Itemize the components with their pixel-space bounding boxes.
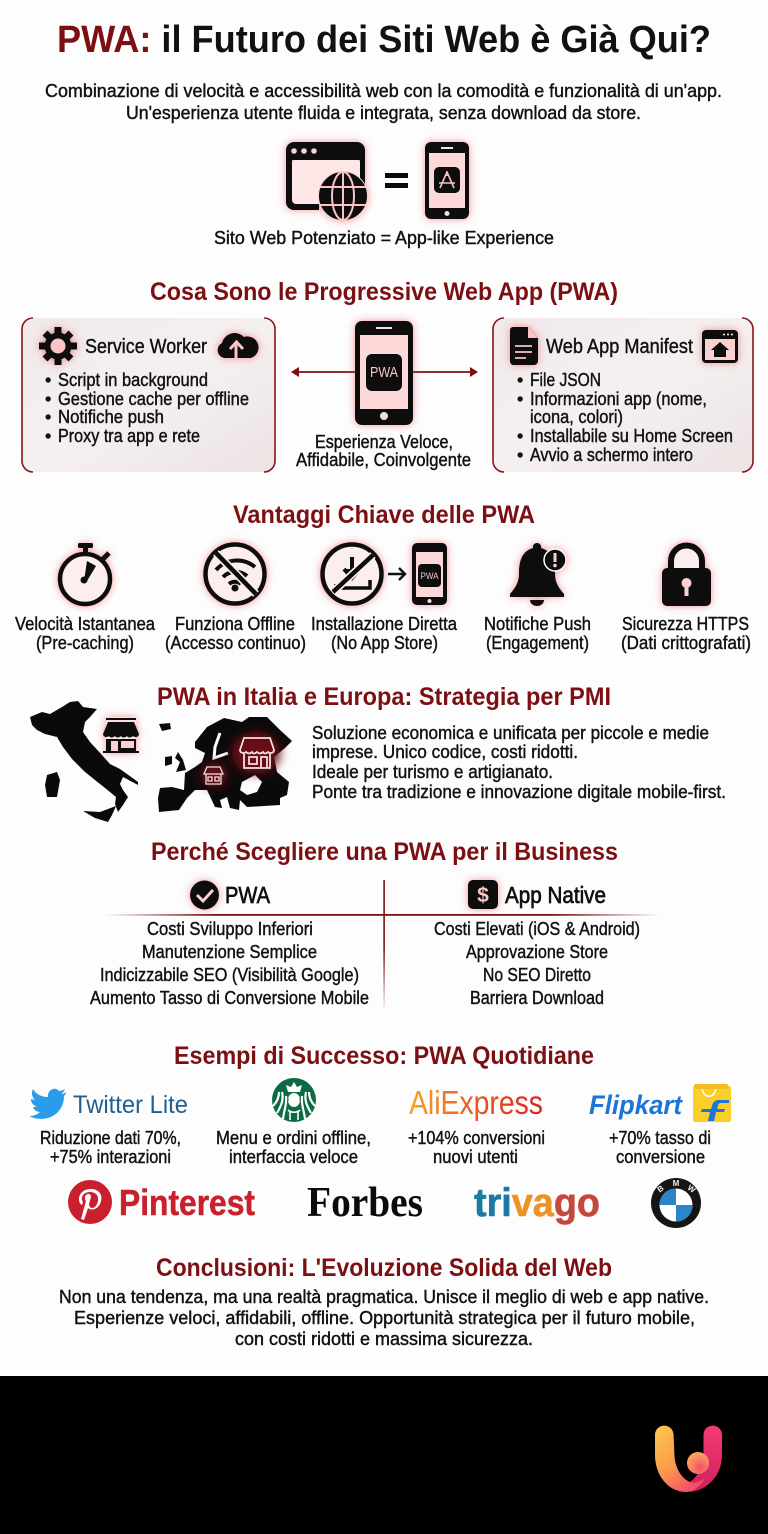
icon: phone with store app (425, 142, 469, 219)
example: AliExpress (408, 1084, 545, 1167)
column: PWA: PWA (225, 882, 271, 908)
panel heading: Service Worker (85, 336, 207, 358)
example: AliExpress: AliExpress (409, 1084, 543, 1121)
icon: small shop (204, 767, 223, 784)
icon: stopwatch (60, 543, 110, 604)
column: native app (434, 880, 640, 1008)
example: Twitter Lite: Twitter Lite (73, 1091, 188, 1119)
icon: phone (355, 321, 413, 425)
logo: Twitter bird (29, 1089, 66, 1119)
bullet list: • (517, 426, 523, 446)
bullet list: Proxy tra app e rete (58, 426, 200, 446)
example: Flipkart: conversione (616, 1147, 705, 1167)
conclusion text: Esperienze veloci, affidabili, offline. Opportunità strategica per il futuro mobile, (74, 1308, 695, 1328)
icon: shop (103, 717, 139, 753)
intro text (45, 81, 722, 123)
shop glow (232, 732, 280, 774)
title: PWA: il Futuro dei Siti Web è Già Qui? (57, 19, 711, 61)
advantage: HTTPS security: Sicurezza HTTPS (622, 614, 749, 634)
column: PWA: Manutenzione Semplice (142, 942, 317, 962)
column: native app: Costi Elevati (iOS & Android) (434, 919, 640, 939)
example: Flipkart: +70% tasso di (609, 1128, 711, 1148)
comparison table (90, 880, 660, 1012)
equation caption: Sito Web Potenziato = App-like Experience (214, 228, 554, 248)
heading: business comparison: Perché Scegliere una PWA per il Business (151, 838, 618, 866)
advantage: push notifications (484, 543, 591, 653)
icon: home window (702, 330, 738, 363)
example: Twitter Lite: +75% interazioni (50, 1147, 171, 1167)
advantage: offline: (Accesso continuo) (165, 633, 306, 653)
advantage: push notifications: (Engagement) (486, 633, 589, 653)
advantage: offline (165, 544, 306, 653)
example: Starbucks (216, 1078, 371, 1167)
bullet list: • (517, 389, 523, 409)
advantage: HTTPS security: (Dati crittografati) (621, 633, 751, 653)
text: SME strategy (312, 723, 726, 802)
bullet list: • (45, 407, 51, 427)
icon: browser with globe (286, 142, 368, 220)
heading: Italy and Europe: PWA in Italia e Europa: Strategia per PMI (157, 683, 611, 711)
column: native app: Barriera Download (470, 988, 604, 1008)
advantage: direct install: (No App Store) (331, 633, 438, 653)
text: SME strategy: Soluzione economica e unificata per piccole e medie (312, 723, 709, 743)
central PWA phone with arrows (291, 321, 478, 470)
column: native app: Approvazione Store (466, 942, 608, 962)
logo: BMW: B (656, 1183, 666, 1194)
central PWA phone with arrows: Affidabile, Coinvolgente (296, 450, 471, 470)
panel: web app manifest (493, 318, 753, 472)
logo: Pinterest: Pinterest (119, 1182, 255, 1223)
advantage: HTTPS security (621, 545, 751, 653)
bullet list: Gestione cache per offline (58, 389, 249, 409)
text: SME strategy: Ideale per turismo e artigianato. (312, 762, 553, 782)
icon: bell (510, 543, 566, 606)
text: SME strategy: imprese. Unico codice, costi ridotti. (312, 742, 578, 762)
footer band (0, 1376, 768, 1534)
icon: document (510, 327, 538, 365)
logo: trivago: trivago (474, 1181, 600, 1225)
logo: BMW (651, 1178, 701, 1228)
bullet list: Informazioni app (nome, (530, 389, 707, 409)
bullet list: Avvio a schermo intero (530, 445, 693, 465)
advantage: speed: (Pre-caching) (36, 633, 134, 653)
example: Twitter Lite (29, 1089, 188, 1167)
equals sign (385, 173, 408, 188)
column: native app: App Native (505, 882, 606, 908)
conclusion text (59, 1287, 709, 1349)
example: AliExpress: +104% conversioni (408, 1128, 545, 1148)
icon: large shop (240, 738, 274, 768)
bullet list: Installabile su Home Screen (530, 426, 733, 446)
bullet list: • (517, 370, 523, 390)
icon: no wifi (206, 544, 264, 604)
example: Starbucks: interfaccia veloce (229, 1147, 358, 1167)
bullet list: File JSON (530, 370, 601, 390)
logo: Forbes: Forbes (307, 1180, 423, 1226)
advantage: offline: Funziona Offline (175, 614, 295, 634)
heading: conclusions: Conclusioni: L'Evoluzione Solida del Web (156, 1254, 612, 1282)
logo: Flipkart bag (693, 1084, 731, 1122)
panel heading: Web App Manifest (546, 336, 693, 358)
intro text: Combinazione di velocità e accessibilità web con la comodità e funzionalità di un'app. (45, 81, 722, 101)
icon: phone (412, 543, 447, 605)
column: PWA: Indicizzabile SEO (Visibilità Google) (100, 965, 359, 985)
icon: no download (322, 544, 382, 604)
advantage: direct install: Installazione Diretta (311, 614, 458, 634)
intro text: Un'esperienza utente fluida e integrata, senza download da store. (126, 103, 641, 123)
heading: success stories: Esempi di Successo: PWA Quotidiane (174, 1042, 594, 1070)
conclusion text: con costi ridotti e massima sicurezza. (235, 1329, 533, 1349)
divider lines (105, 914, 660, 916)
icon: phone: PWA (370, 364, 398, 381)
arrows (291, 367, 478, 377)
icon: phone: PWA (420, 571, 438, 581)
conclusion text: Non una tendenza, ma una realtà pragmatica. Unisce il meglio di web e app native. (59, 1287, 709, 1307)
advantage: direct install (311, 543, 458, 653)
column: PWA (90, 880, 369, 1008)
column: native app: $ (477, 884, 489, 907)
bullet list: • (45, 426, 51, 446)
logo: Pinterest (68, 1180, 255, 1224)
bullet list (45, 370, 249, 446)
logo: BMW: M (673, 1179, 680, 1188)
panel: service worker (22, 318, 275, 472)
logo: Starbucks (272, 1078, 316, 1122)
column: native app: No SEO Diretto (483, 965, 591, 985)
example: Starbucks: Menu e ordini offline, (216, 1128, 371, 1148)
bullet list: Script in background (58, 370, 208, 390)
bullet list: • (517, 445, 523, 465)
example: Flipkart (589, 1084, 731, 1167)
icon: cloud upload (218, 333, 259, 358)
column: PWA: Aumento Tasso di Conversione Mobile (90, 988, 369, 1008)
icon: padlock (662, 545, 711, 606)
bullet list: • (45, 370, 51, 390)
bullet list: icona, colori) (530, 407, 623, 427)
advantage: speed (15, 543, 156, 653)
text: SME strategy: Ponte tra tradizione e innovazione digitale mobile-first. (312, 782, 726, 802)
example: AliExpress: nuovi utenti (433, 1147, 518, 1167)
bullet list: • (45, 389, 51, 409)
logo: BMW: W (686, 1183, 697, 1195)
example: Twitter Lite: Riduzione dati 70%, (40, 1128, 181, 1148)
bullet list (517, 370, 733, 465)
column: PWA: Costi Sviluppo Inferiori (147, 919, 313, 939)
bullet list: Notifiche push (58, 407, 164, 427)
advantage: speed: Velocità Istantanea (15, 614, 156, 634)
heading: what are PWAs: Cosa Sono le Progressive Web App (PWA) (150, 278, 618, 306)
heading: key advantages: Vantaggi Chiave delle PWA (233, 501, 535, 529)
icon: gear (39, 327, 77, 365)
example: Flipkart: Flipkart (589, 1090, 683, 1120)
equation icons: website equals app (286, 142, 469, 220)
map: Europe (158, 717, 292, 812)
map: Italy (30, 701, 139, 822)
phone caption: Esperienza Veloce, (315, 432, 453, 452)
advantage: push notifications: Notifiche Push (484, 614, 591, 634)
logo: footer U mark (655, 1426, 722, 1492)
arrow (388, 568, 405, 580)
